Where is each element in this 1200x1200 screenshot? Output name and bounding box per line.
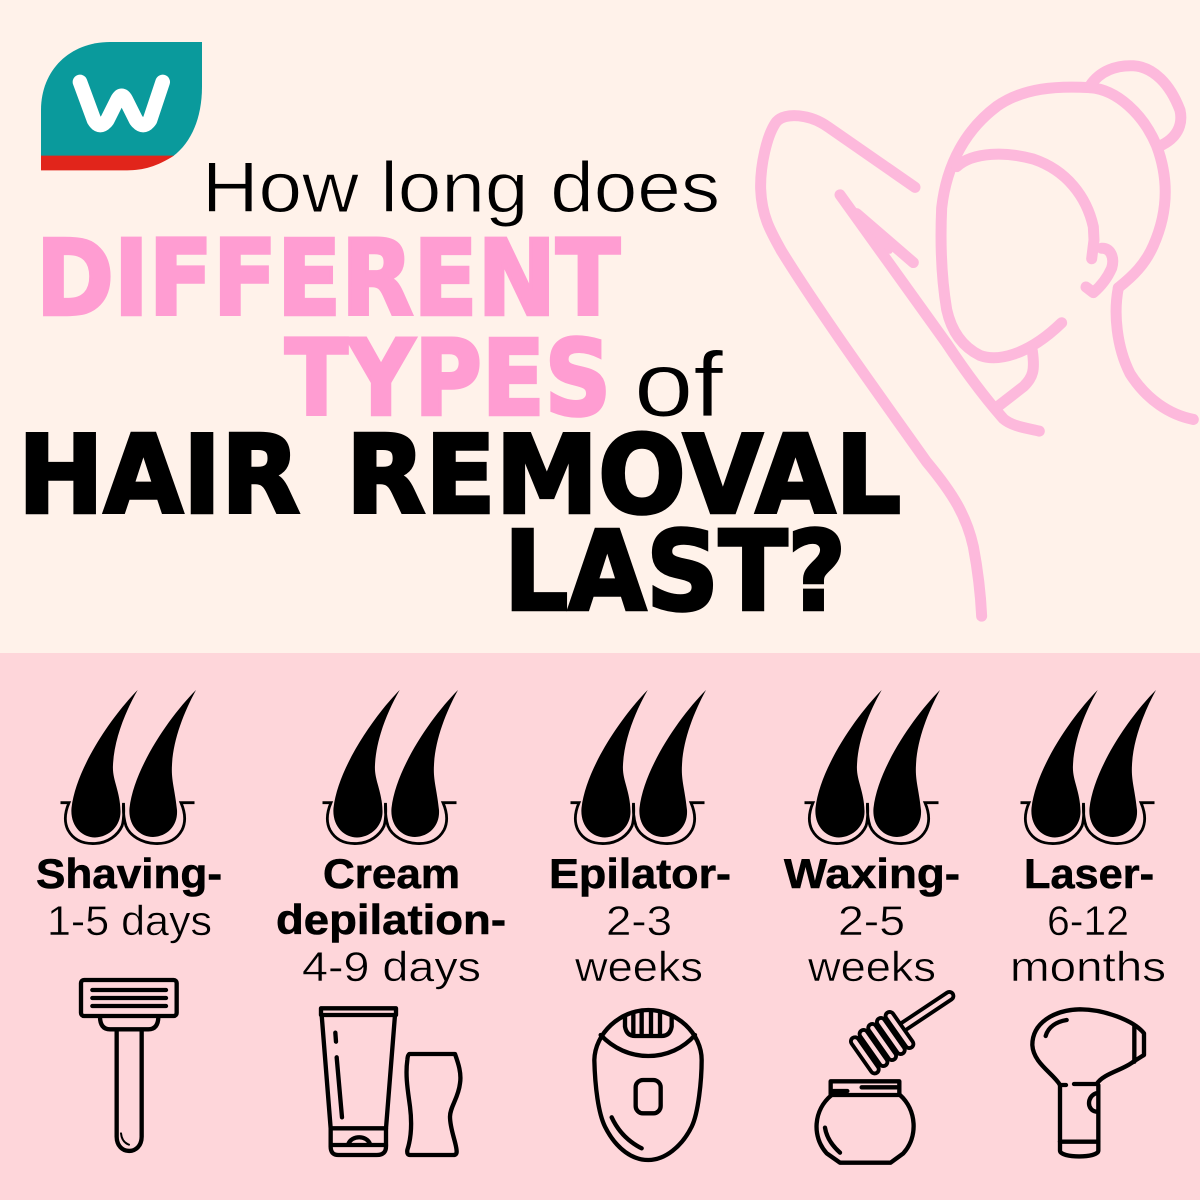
icon: Watsons logo bbox=[41, 42, 202, 170]
icon: hair follicles bbox=[570, 690, 706, 844]
duration: 2-3 weeks bbox=[574, 897, 703, 990]
icon: honey dipper and wax jar bbox=[817, 996, 949, 1163]
icon: hair follicles bbox=[60, 690, 196, 844]
heading: Laser: Laser- bbox=[1024, 850, 1154, 897]
title line: TYPES: TYPES bbox=[285, 318, 611, 440]
heading: Cream depilation bbox=[276, 850, 506, 943]
duration: 6-12 months: 6-12 bbox=[1047, 897, 1129, 944]
column: Epilator bbox=[549, 690, 731, 1160]
heading: Epilator: Epilator- bbox=[549, 850, 731, 897]
heading: Waxing: Waxing- bbox=[784, 850, 960, 897]
icon: cream tube and bottle bbox=[321, 1008, 460, 1155]
duration: 2-5 weeks bbox=[807, 897, 936, 990]
duration: 6-12 months bbox=[1010, 897, 1166, 990]
heading: Cream depilation: depilation- bbox=[276, 896, 506, 943]
heading: Cream depilation: Cream bbox=[323, 850, 460, 897]
title line: LAST?: LAST? bbox=[504, 508, 846, 636]
column: Laser bbox=[1010, 690, 1166, 1156]
duration: 2-3 weeks: weeks bbox=[574, 943, 703, 990]
icon: hair follicles bbox=[322, 690, 458, 844]
icon: hair follicles bbox=[1020, 690, 1156, 844]
title line: of: of bbox=[634, 334, 724, 436]
column: Shaving bbox=[36, 690, 222, 1151]
background: cream upper panel bbox=[0, 0, 1200, 654]
duration: 2-5 weeks: 2-5 bbox=[838, 897, 905, 944]
duration: 4-9 days: 4-9 days bbox=[302, 943, 481, 990]
title line: HAIR REMOVAL: HAIR bbox=[18, 414, 300, 538]
icon: hair follicles bbox=[804, 690, 940, 844]
column: Cream depilation bbox=[276, 690, 506, 1155]
title bbox=[18, 149, 901, 636]
duration: 2-3 weeks: 2-3 bbox=[606, 897, 672, 944]
column: Waxing bbox=[784, 690, 960, 1163]
duration: 2-5 weeks: weeks bbox=[807, 943, 936, 990]
icon: laser device bbox=[1032, 1009, 1144, 1156]
illustration: woman raising arm, pink line art bbox=[761, 66, 1193, 616]
title line: HAIR REMOVAL bbox=[18, 414, 901, 538]
duration: 6-12 months: months bbox=[1010, 943, 1166, 990]
duration: 1-5 days: 1-5 days bbox=[47, 897, 212, 944]
icon: epilator bbox=[594, 1010, 702, 1160]
title line: HAIR REMOVAL: REMOVAL bbox=[346, 414, 901, 538]
title line: DIFFERENT: DIFFERENT bbox=[36, 218, 620, 340]
icon: razor bbox=[81, 980, 177, 1151]
title line: How long does: How long does bbox=[202, 149, 720, 228]
heading: Shaving: Shaving- bbox=[36, 850, 222, 897]
background: pink lower panel bbox=[0, 653, 1200, 1200]
